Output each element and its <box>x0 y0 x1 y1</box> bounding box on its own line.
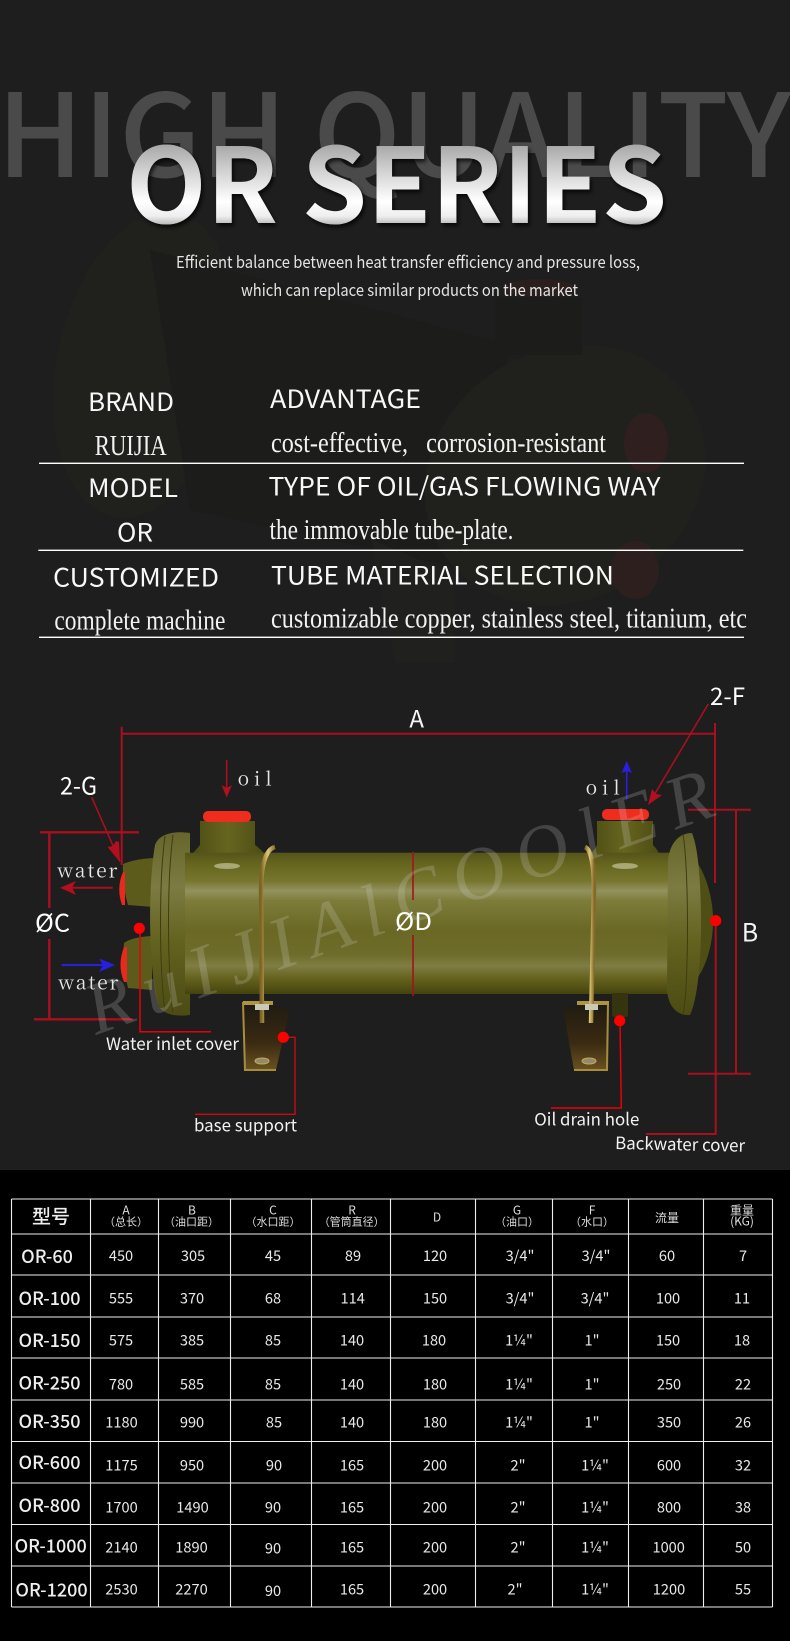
part: right bracket <box>563 847 628 1070</box>
table header: R <box>348 1201 356 1218</box>
row OR-100: 100 <box>656 1288 680 1308</box>
table header: C <box>269 1201 277 1218</box>
row OR-100: 555 <box>109 1288 133 1308</box>
table header: B <box>188 1201 196 1218</box>
callout: backwater cover: Backwater cover <box>615 1129 746 1157</box>
row OR-100: 11 <box>734 1288 750 1308</box>
callout: base support <box>194 1032 298 1136</box>
spec block: brand and advantage: RUIJIA <box>95 431 167 462</box>
row OR-1000: 2" <box>510 1536 526 1557</box>
callout: base support: base support <box>194 1112 298 1136</box>
table header: G <box>513 1201 521 1218</box>
row OR-100: 68 <box>265 1288 281 1308</box>
arrow: oil out: oil <box>586 773 620 800</box>
table header: （水口） <box>576 1214 608 1230</box>
row OR-800: 200 <box>423 1496 447 1517</box>
spec block: model and flowing way: TYPE OF OIL/GAS FLOWING WAY <box>268 466 661 503</box>
subtitle <box>176 249 640 301</box>
table header: 重量 <box>730 1201 754 1218</box>
row OR-1200: 200 <box>423 1578 447 1599</box>
row OR-60: 450 <box>109 1245 133 1266</box>
row OR-250: 140 <box>340 1373 364 1394</box>
background: dark panel <box>0 0 790 1170</box>
row OR-100: 370 <box>180 1288 204 1308</box>
row OR-1200: OR-1200 <box>15 1577 88 1603</box>
row OR-150: 575 <box>109 1330 133 1351</box>
row OR-350: 350 <box>657 1411 681 1432</box>
table header: （油口距） <box>170 1214 214 1230</box>
row OR-1200: 90 <box>265 1580 281 1601</box>
row OR-350: 85 <box>266 1411 282 1432</box>
callout: oil drain hole <box>534 1015 639 1131</box>
row OR-150: 1¼" <box>505 1330 533 1351</box>
spec block: brand and advantage: BRAND <box>88 382 174 419</box>
row OR-350 <box>19 1408 751 1434</box>
dimension: diameter C <box>34 832 139 1019</box>
row OR-800: OR-800 <box>19 1492 80 1518</box>
row OR-100: 114 <box>341 1288 365 1308</box>
part: right flange <box>667 833 713 1015</box>
row OR-350: 1" <box>584 1411 600 1432</box>
row OR-100: 150 <box>423 1288 447 1308</box>
callout: oil drain hole: Oil drain hole <box>534 1106 639 1131</box>
background watermark: faint cooler photo <box>27 195 753 662</box>
row OR-800: 38 <box>735 1496 751 1517</box>
row OR-350: 180 <box>423 1411 447 1432</box>
row OR-800: 90 <box>265 1496 281 1517</box>
row OR-60 <box>21 1243 747 1269</box>
row OR-350: 1180 <box>105 1411 138 1432</box>
callout: water inlet cover <box>106 923 239 1055</box>
row OR-60: 89 <box>345 1245 361 1266</box>
row OR-1000: 1000 <box>652 1536 685 1557</box>
row OR-1000: 200 <box>423 1536 447 1557</box>
row OR-800: 165 <box>340 1496 364 1517</box>
row OR-1000: 1¼" <box>581 1536 609 1557</box>
label and arrow: 2-F <box>648 677 745 805</box>
row OR-1000: OR-1000 <box>15 1532 87 1558</box>
dimension: diameter D: ØD <box>395 902 432 937</box>
row OR-1200 <box>15 1577 751 1603</box>
spec block: model and flowing way: the immovable tube-plate. <box>270 514 514 546</box>
table header: F <box>589 1201 596 1218</box>
table header: （水口距） <box>251 1214 295 1230</box>
table header: 流量 <box>655 1209 679 1226</box>
row OR-1000: 165 <box>340 1536 364 1557</box>
row OR-600: 200 <box>423 1454 447 1475</box>
callout: backwater cover <box>615 915 746 1157</box>
part: left bracket <box>243 847 290 1070</box>
table header: A <box>122 1201 130 1218</box>
dimension B <box>688 810 758 1074</box>
row OR-60: OR-60 <box>21 1243 73 1269</box>
row OR-350: 140 <box>340 1411 364 1432</box>
row OR-250: 1¼" <box>505 1373 533 1394</box>
row OR-60: 45 <box>265 1245 281 1266</box>
row OR-100: 3/4" <box>506 1288 534 1308</box>
row OR-100: OR-100 <box>19 1285 80 1311</box>
row OR-800: 1¼" <box>581 1496 609 1517</box>
row OR-60: 60 <box>659 1245 675 1266</box>
row OR-1200: 1¼" <box>581 1578 609 1599</box>
row OR-1200: 55 <box>735 1578 751 1599</box>
row OR-350: 990 <box>180 1411 204 1432</box>
row OR-150: 18 <box>734 1330 750 1351</box>
background: table area <box>0 1170 790 1641</box>
part: top ports <box>190 809 660 856</box>
row OR-1200: 165 <box>340 1578 364 1599</box>
row OR-600: 600 <box>657 1454 681 1475</box>
table header: D <box>433 1209 441 1226</box>
row OR-1200: 2530 <box>105 1578 138 1599</box>
row OR-600: 950 <box>180 1454 204 1475</box>
row OR-800: 800 <box>657 1496 681 1517</box>
arrow: water out <box>56 857 118 895</box>
row OR-600: 90 <box>266 1454 282 1475</box>
table header: （总长） <box>110 1214 142 1230</box>
row OR-60: 3/4" <box>506 1245 534 1266</box>
table header: （油口） <box>500 1214 534 1230</box>
row OR-250: 585 <box>180 1373 204 1394</box>
spec block: brand and advantage: cost-effective, corrosion-resistant <box>271 427 606 459</box>
spec block: model and flowing way <box>38 466 743 551</box>
table header: (KG) <box>730 1213 754 1230</box>
table grid <box>12 1199 772 1607</box>
spec block: model and flowing way: MODEL <box>88 468 178 505</box>
row OR-800: 1490 <box>176 1496 209 1517</box>
table header: 型号 <box>32 1202 70 1229</box>
arrow: water out: water <box>56 857 118 884</box>
label and arrow: 2-F: 2-F <box>710 677 745 712</box>
subtitle: Efficient balance between heat transfer efficiency and pressure loss, <box>176 249 640 273</box>
row OR-350: OR-350 <box>19 1408 80 1434</box>
spec block: customized and tube material <box>39 555 747 638</box>
spec block: customized and tube material: complete machine <box>54 604 225 636</box>
row OR-600: 2" <box>510 1454 526 1475</box>
row OR-600 <box>19 1449 751 1475</box>
row OR-60: 305 <box>181 1245 205 1266</box>
row OR-600: 1¼" <box>581 1454 609 1475</box>
row OR-60: 120 <box>423 1245 447 1266</box>
label and arrow: 2-G: 2-G <box>60 766 97 801</box>
dimension: diameter C: ØC <box>35 904 70 939</box>
part: shell tube <box>185 853 671 994</box>
specification table <box>12 1199 772 1607</box>
row OR-150: 180 <box>422 1330 446 1351</box>
part: left flange <box>150 832 190 1016</box>
part: weld highlights <box>214 863 638 869</box>
row OR-150: OR-150 <box>19 1327 80 1353</box>
label and arrow: 2-G <box>60 766 120 862</box>
row OR-250: 250 <box>657 1373 681 1394</box>
row OR-60: 3/4" <box>582 1245 610 1266</box>
row OR-150 <box>19 1327 750 1353</box>
part: left ports <box>119 858 153 990</box>
row OR-600: 32 <box>735 1454 751 1475</box>
spec block: model and flowing way: OR <box>117 513 153 550</box>
row OR-250: 22 <box>735 1373 751 1394</box>
table header <box>32 1201 754 1230</box>
subtitle: which can replace similar products on the market <box>241 277 578 301</box>
table header: （管筒直径） <box>324 1214 379 1230</box>
dimension A: A <box>409 700 424 735</box>
row OR-800: 1700 <box>105 1496 138 1517</box>
spec block: customized and tube material: TUBE MATERIAL SELECTION <box>271 555 614 592</box>
row OR-600: 1175 <box>105 1454 138 1475</box>
row OR-1000: 90 <box>265 1537 281 1558</box>
row OR-250: OR-250 <box>19 1369 80 1395</box>
row OR-250: 180 <box>423 1373 447 1394</box>
row OR-60: 7 <box>739 1245 747 1266</box>
row OR-1200: 1200 <box>653 1578 685 1599</box>
row OR-250: 1" <box>584 1373 600 1394</box>
row OR-150: 140 <box>340 1330 364 1351</box>
row OR-600: 165 <box>340 1454 364 1475</box>
row OR-1000: 2140 <box>105 1536 138 1557</box>
row OR-1000 <box>15 1532 751 1558</box>
product: oil cooler <box>119 809 713 1070</box>
arrow: oil in <box>222 760 272 798</box>
row OR-1200: 2270 <box>175 1578 208 1599</box>
row OR-350: 1¼" <box>505 1411 533 1432</box>
row OR-1200: 2" <box>507 1578 523 1599</box>
dimension B: B <box>742 914 758 950</box>
row OR-600: OR-600 <box>19 1449 80 1475</box>
callout: water inlet cover: Water inlet cover <box>106 1030 239 1055</box>
row OR-800: 2" <box>510 1496 526 1517</box>
row OR-350: 26 <box>735 1411 751 1432</box>
spec block: customized and tube material: CUSTOMIZED <box>53 558 219 595</box>
row OR-150: 85 <box>265 1330 281 1351</box>
row OR-800 <box>19 1492 751 1518</box>
watermark: RUIJIA COOLER: RuIJIAlCOOlER <box>73 753 724 1051</box>
dimension A <box>122 700 715 883</box>
part: flange seams <box>160 834 688 1015</box>
row OR-150: 1" <box>584 1330 600 1351</box>
arrow: oil out <box>586 761 632 800</box>
arrow: water in: water <box>57 968 119 995</box>
row OR-100 <box>19 1285 750 1311</box>
row OR-1000: 1890 <box>175 1536 208 1557</box>
spec block: brand and advantage <box>39 379 744 464</box>
background heading: HIGH QUALITY: HIGH QUALITY <box>0 45 790 211</box>
spec block: brand and advantage: ADVANTAGE <box>270 379 421 416</box>
arrow: oil in: oil <box>238 764 272 791</box>
title: OR SERIES: OR SERIES <box>126 102 667 253</box>
row OR-250 <box>19 1369 751 1395</box>
row OR-250: 85 <box>265 1373 281 1394</box>
row OR-150: 385 <box>180 1330 204 1351</box>
row OR-1000: 50 <box>735 1536 751 1557</box>
row OR-150: 150 <box>656 1330 680 1351</box>
row OR-100: 3/4" <box>581 1288 609 1308</box>
row OR-250: 780 <box>109 1373 133 1394</box>
